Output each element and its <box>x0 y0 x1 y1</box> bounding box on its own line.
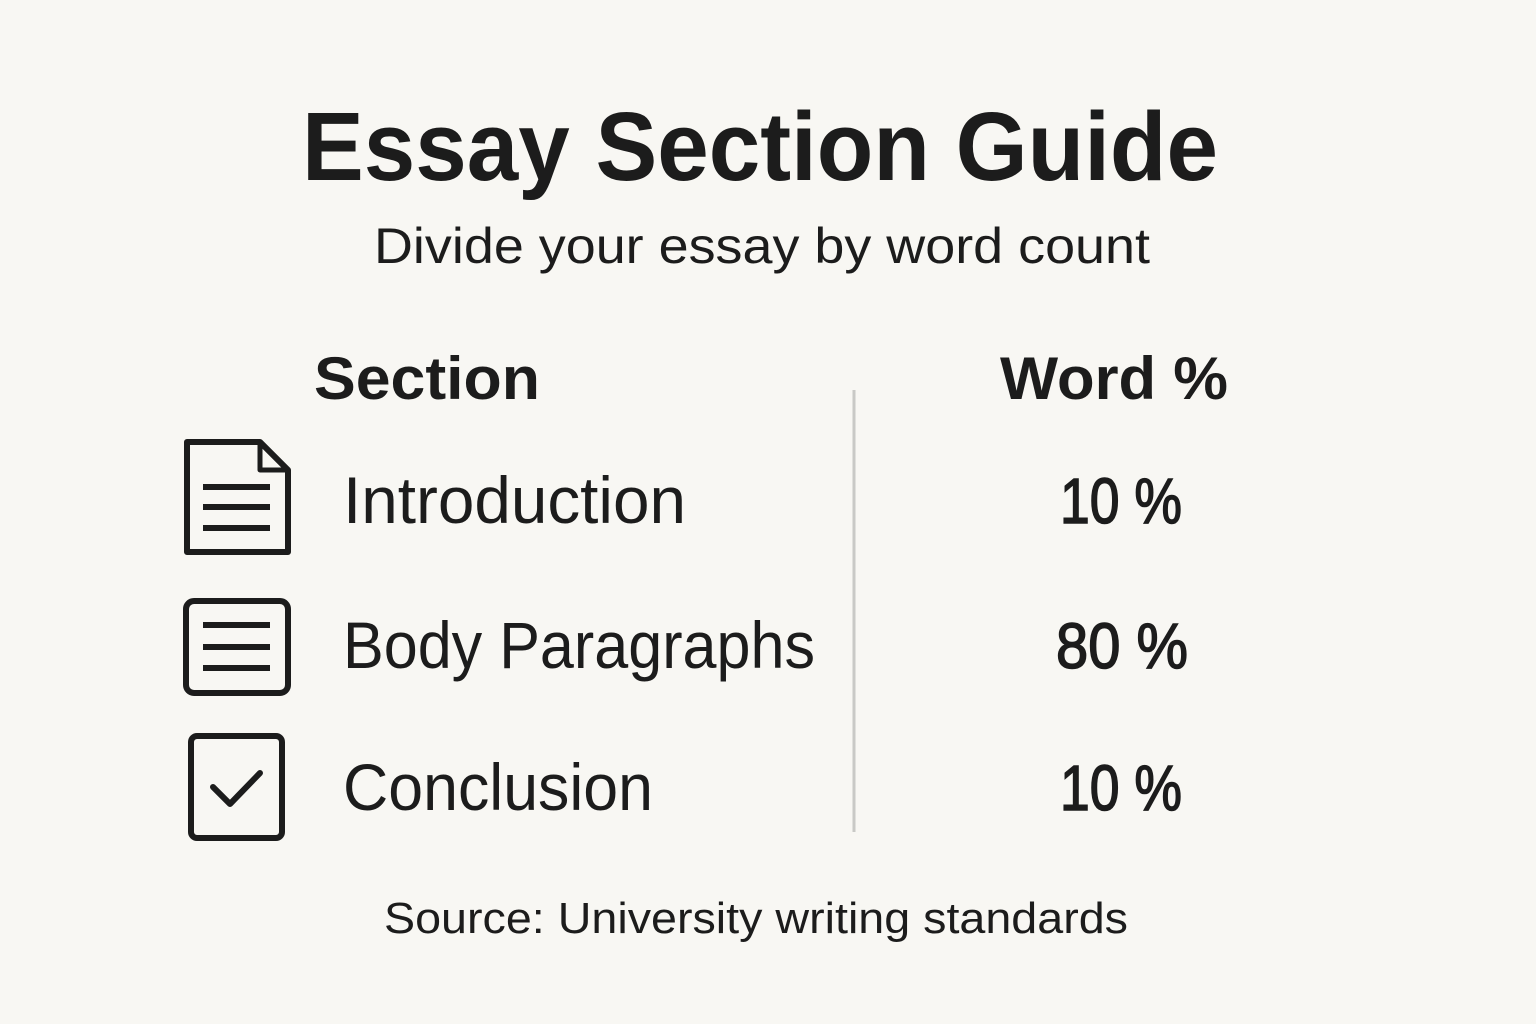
value: conclusion: 10 % <box>1060 752 1182 824</box>
value: introduction: 10 % <box>1060 465 1182 537</box>
icon: document <box>187 442 288 552</box>
row label: body paragraphs: Body Paragraphs <box>343 608 815 682</box>
icon: checkbox <box>191 736 282 838</box>
row label: conclusion: Conclusion <box>343 750 653 824</box>
title: Essay Section Guide <box>302 92 1218 201</box>
icon: paragraph lines <box>186 601 288 693</box>
column header: section: Section <box>314 345 540 412</box>
column header: word percent: Word % <box>1000 345 1228 412</box>
source note: Source: University writing standards <box>384 894 1128 943</box>
subtitle: Divide your essay by word count <box>374 218 1150 274</box>
row label: introduction: Introduction <box>343 463 686 537</box>
value: body: 80 % <box>1056 610 1188 682</box>
